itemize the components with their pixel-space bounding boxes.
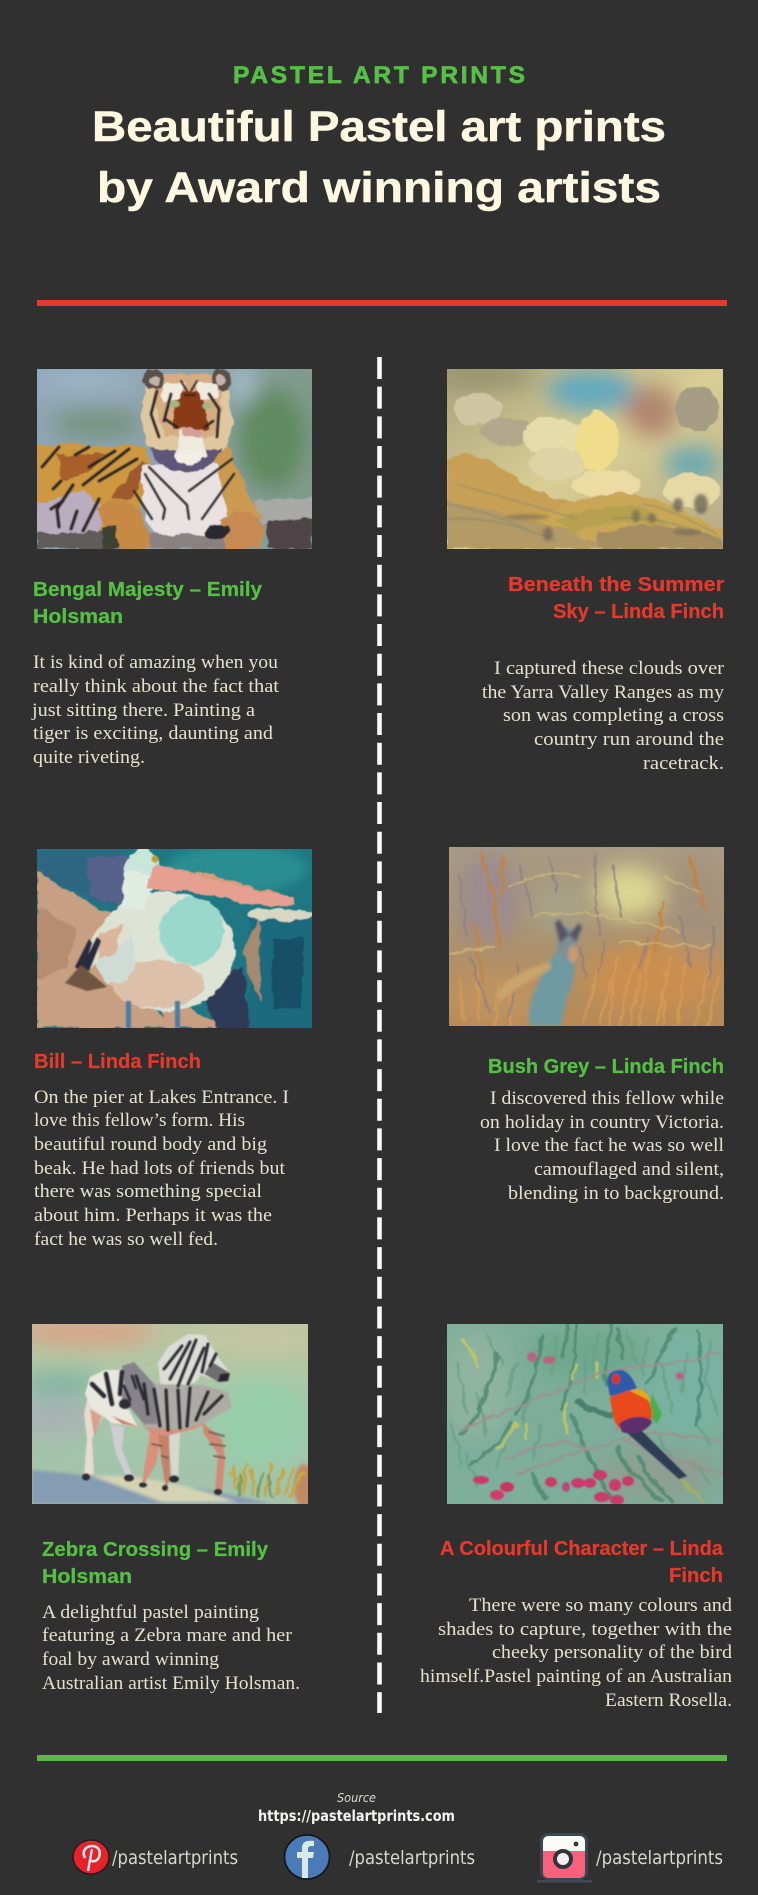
body text: on holiday in country Victoria. <box>480 1112 724 1133</box>
body text: country run around the <box>534 729 724 750</box>
body text: There were so many colours and <box>469 1595 733 1616</box>
main heading: Beautiful Pastel art prints <box>92 104 666 151</box>
heading: Zebra Crossing <box>42 1539 269 1588</box>
body text: love this fellow’s form. His <box>34 1110 245 1131</box>
handle: /pastelartprints <box>349 1847 475 1869</box>
body text: Australian artist Emily Holsman. <box>42 1673 300 1694</box>
painting: zebras <box>32 1324 308 1504</box>
social: pinterest <box>73 1840 238 1874</box>
heading: Zebra Crossing: Zebra Crossing – Emily <box>42 1539 269 1561</box>
body text <box>31 652 280 768</box>
painting: pelican <box>37 849 312 1028</box>
body text: It is kind of amazing when you <box>33 652 279 673</box>
body text <box>42 1602 300 1694</box>
body text: just sitting there. Painting a <box>31 700 256 721</box>
body text: I love the fact he was so well <box>494 1135 724 1156</box>
body text: camouflaged and silent, <box>534 1159 724 1180</box>
heading: Bush Grey: Bush Grey – Linda Finch <box>488 1056 724 1078</box>
heading: Beneath the Summer Sky: Beneath the Summer <box>508 574 724 596</box>
body text: the Yarra Valley Ranges as my <box>482 682 725 703</box>
main heading: by Award winning artists <box>97 165 661 212</box>
panel: Bill <box>34 845 314 1250</box>
heading: A Colourful Character <box>440 1538 724 1587</box>
body text: shades to capture, together with the <box>438 1619 732 1640</box>
painting: rainbow lorikeet <box>447 1324 723 1504</box>
green divider <box>37 1755 727 1761</box>
body text <box>480 1088 724 1204</box>
body text: featuring a Zebra mare and her <box>42 1625 293 1646</box>
painting: kangaroo <box>449 847 724 1026</box>
icon: facebook <box>284 1835 330 1879</box>
heading: Bengal Majesty: Bengal Majesty – Emily <box>33 579 263 601</box>
heading: Bill: Bill – Linda Finch <box>34 1051 201 1073</box>
handle: /pastelartprints <box>112 1847 238 1869</box>
heading: Zebra Crossing: Holsman <box>42 1566 132 1588</box>
main heading <box>92 104 666 212</box>
heading: A Colourful Character: Finch <box>669 1565 723 1587</box>
body text: about him. Perhaps it was the <box>34 1205 272 1226</box>
body text: son was completing a cross <box>503 705 724 726</box>
body text: blending in to background. <box>508 1183 724 1204</box>
body text <box>482 658 725 774</box>
painting: hills and clouds <box>447 369 723 549</box>
body text: really think about the fact that <box>33 676 280 697</box>
body text: beak. He had lots of friends but <box>34 1158 286 1179</box>
panel: Beneath the Summer Sky <box>437 367 725 774</box>
heading: Beneath the Summer Sky: Sky – Linda Finch <box>553 601 724 623</box>
body text: there was something special <box>34 1181 262 1202</box>
body text <box>34 1087 289 1250</box>
body text: quite riveting. <box>33 747 145 768</box>
source url: https://pastelartprints.com <box>258 1807 455 1825</box>
social: facebook <box>284 1835 475 1879</box>
eyebrow title: PASTEL ART PRINTS <box>233 62 525 89</box>
body text: tiger is exciting, daunting and <box>33 723 274 744</box>
body text <box>420 1595 733 1711</box>
icon: pinterest <box>73 1840 109 1874</box>
panel: A Colourful Character <box>420 1324 733 1711</box>
panel: Bengal Majesty <box>31 364 312 768</box>
vertical dashed divider <box>377 357 382 1713</box>
body text: I captured these clouds over <box>494 658 725 679</box>
body text: beautiful round body and big <box>34 1134 268 1155</box>
body text: A delightful pastel painting <box>42 1602 260 1623</box>
heading: A Colourful Character: A Colourful Character – Linda <box>440 1538 724 1560</box>
heading: Bengal Majesty <box>33 579 263 628</box>
red divider <box>37 300 727 306</box>
body text: foal by award winning <box>42 1649 220 1670</box>
body text: cheeky personality of the bird <box>492 1642 733 1663</box>
body text: himself.Pastel painting of an Australian <box>420 1666 733 1687</box>
icon: instagram <box>537 1833 592 1882</box>
heading: Bengal Majesty: Holsman <box>33 606 123 628</box>
heading: Beneath the Summer Sky <box>508 574 724 623</box>
panel: Bush Grey <box>444 847 724 1204</box>
panel: Zebra Crossing <box>7 1320 322 1694</box>
body text: I discovered this fellow while <box>490 1088 724 1109</box>
body text: fact he was so well fed. <box>34 1229 218 1250</box>
body text: Eastern Rosella. <box>605 1690 732 1711</box>
social: instagram <box>537 1833 723 1882</box>
body text: On the pier at Lakes Entrance. I <box>34 1087 289 1108</box>
source label: Source <box>337 1791 376 1805</box>
painting: tiger <box>37 369 312 549</box>
handle: /pastelartprints <box>596 1847 723 1869</box>
body text: racetrack. <box>643 753 724 774</box>
